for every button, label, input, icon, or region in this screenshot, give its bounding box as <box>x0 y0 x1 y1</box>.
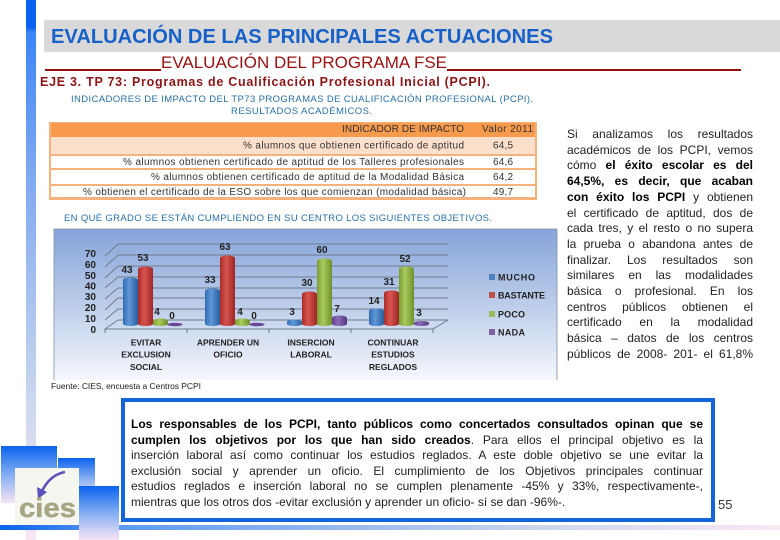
indicators heading <box>71 94 533 117</box>
y axis labels: 0 <box>90 325 96 336</box>
category labels: EXCLUSION <box>121 350 171 360</box>
indicators heading: RESULTADOS ACADÉMICOS. <box>231 106 372 117</box>
y axis labels: 30 <box>85 292 96 303</box>
indicators table: % obtienen el certificado de la ESO sobre los que comienzan (modalidad básica) <box>83 187 466 198</box>
right commentary text: similares en las modalidades <box>567 268 753 282</box>
indicators table: 64,2 <box>493 172 513 183</box>
cies logo: cies <box>19 493 76 523</box>
right commentary text: la prueba o abandona antes de <box>567 237 753 251</box>
right commentary text: con éxito los PCPI y obtienen <box>567 190 753 204</box>
data labels: 63 <box>219 242 231 253</box>
bottom horizontal bar <box>0 525 780 530</box>
category labels: LABORAL <box>290 350 332 360</box>
category labels: OFICIO <box>213 350 243 360</box>
indicators table: % alumnos que obtienen certificado de aptitud <box>243 140 464 152</box>
series bars: group 1 <box>123 266 182 326</box>
source note: Fuente: CIES, encuesta a Centros PCPI <box>51 381 201 391</box>
right commentary text: Si analizamos los resultados <box>567 127 753 141</box>
right commentary text: cada tres, y el resto o no supera <box>567 221 753 235</box>
right commentary text: básica o profesional. En los <box>567 284 753 298</box>
legend: MUCHO <box>498 272 535 282</box>
legend <box>489 272 545 338</box>
legend: NADA <box>498 328 526 338</box>
data labels <box>121 242 422 322</box>
y axis labels <box>85 249 96 336</box>
series bars: group 3 <box>287 258 347 326</box>
legend: BASTANTE <box>498 290 545 300</box>
y axis labels: 50 <box>85 271 96 282</box>
title band: EVALUACIÓN DE LAS PRINCIPALES ACTUACIONES <box>51 24 553 48</box>
y axis labels: 70 <box>85 249 96 260</box>
category labels: REGLADOS <box>369 362 417 372</box>
series bars: group 4 <box>369 266 429 326</box>
conclusions text <box>131 417 704 509</box>
right commentary text: centros públicos obtienen el <box>567 300 753 314</box>
data labels: 33 <box>204 275 216 286</box>
page number: 55 <box>718 497 732 512</box>
indicators table: 64,6 <box>493 157 513 168</box>
category labels: APRENDER UN <box>197 338 259 348</box>
chart heading: EN QUÉ GRADO SE ESTÁN CUMPLIENDO EN SU CENTRO LOS SIGUIENTES OBJETIVOS. <box>64 213 492 224</box>
conclusions box <box>121 398 715 522</box>
data labels: 3 <box>416 308 422 319</box>
data labels: 14 <box>368 296 380 307</box>
data labels: 4 <box>154 307 160 318</box>
indicators table: % alumnos obtienen certificado de aptitud de la Modalidad Básica <box>151 172 464 183</box>
data labels: 53 <box>137 253 149 264</box>
right commentary text: básica – datos de los centros <box>567 331 753 345</box>
right commentary text: públicos de 2008- 201- el 61,8% <box>567 347 753 361</box>
conclusions text: mientras que los otros dos -evitar exclusión y aprender un oficio- sí se dan -96%-. <box>131 495 565 509</box>
y axis labels: 10 <box>85 314 96 325</box>
right commentary text: el certificado de aptitud, dos de <box>567 206 753 220</box>
series bars: group 2 <box>205 256 264 326</box>
right commentary text <box>567 127 754 361</box>
y axis labels: 40 <box>85 282 96 292</box>
category labels: ESTUDIOS <box>371 350 415 360</box>
subtitle: EVALUACIÓN DEL PROGRAMA FSE <box>161 53 447 72</box>
category labels: CONTINUAR <box>368 338 418 348</box>
right commentary text: académicos de los PCPI, vemos <box>567 143 753 157</box>
data labels: 31 <box>383 277 395 288</box>
data labels: 0 <box>251 311 257 322</box>
conclusions text: estudios reglados e inserción laboral no se cumplen plenamente -45% y 33%, respectivamente-, <box>131 479 703 493</box>
category labels: INSERCION <box>287 338 335 348</box>
data labels: 43 <box>121 265 133 276</box>
data labels: 4 <box>237 307 243 318</box>
data labels: 3 <box>289 307 295 318</box>
y axis labels: 20 <box>85 303 96 314</box>
logo squares <box>1 446 119 540</box>
right commentary text: 64,5%, es decir, que acaban <box>567 174 753 188</box>
y axis labels: 60 <box>85 260 96 271</box>
right commentary text: cómo el éxito escolar es del <box>567 158 753 172</box>
conclusions text: Los responsables de los PCPI, tanto públicos como concertados consultados opinan que se <box>131 417 703 431</box>
indicators table <box>49 122 537 200</box>
cies logo <box>15 468 79 525</box>
data labels: 7 <box>334 304 340 315</box>
data labels: 30 <box>301 278 313 289</box>
data labels: 60 <box>316 245 328 256</box>
indicators table: Valor 2011 <box>482 124 533 135</box>
indicators heading: INDICADORES DE IMPACTO DEL TP73 PROGRAMAS DE CUALIFICACIÓN PROFESIONAL (PCPI). <box>71 94 533 105</box>
axis heading: EJE 3. TP 73: Programas de Cualificación Profesional Inicial (PCPI). <box>40 75 490 89</box>
right commentary text: certificado en la modalidad <box>567 315 753 329</box>
indicators table: % alumnos obtienen certificado de aptitud de los Talleres profesionales <box>123 157 464 168</box>
conclusions text: cumplen los objetivos por los que han sido creados. Para ellos el principal objetivo es la <box>131 433 703 447</box>
legend: POCO <box>498 310 525 320</box>
category labels <box>121 338 418 372</box>
bar chart <box>54 229 557 380</box>
category labels: SOCIAL <box>130 362 162 372</box>
title band <box>44 20 780 52</box>
left vertical strip <box>26 0 36 540</box>
data labels: 0 <box>169 311 175 322</box>
category labels: EVITAR <box>131 338 161 348</box>
conclusions text: exclusión social y aprender un oficio. El cumplimiento de los Objetivos principales continuar <box>131 464 703 478</box>
indicators table: 64,5 <box>493 140 513 152</box>
indicators table: 49,7 <box>493 187 513 198</box>
indicators table: INDICADOR DE IMPACTO <box>342 124 464 135</box>
conclusions text: inserción laboral así como continuar los estudios reglados. A este doble objetivo se une evitar la <box>131 448 703 462</box>
data labels: 52 <box>399 254 411 265</box>
right commentary text: finalizar. Los resultados son <box>567 253 753 267</box>
